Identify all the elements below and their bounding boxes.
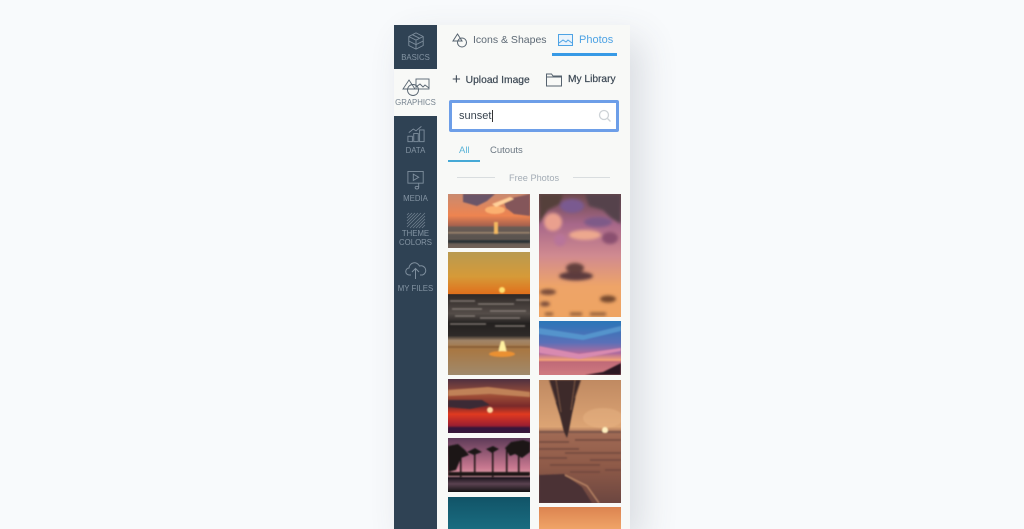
button: upload image: + Upload Image xyxy=(452,71,530,88)
icon: media player xyxy=(408,171,424,190)
subtab underline xyxy=(448,160,480,162)
photo grid xyxy=(448,194,621,529)
icon: photos xyxy=(558,34,573,46)
photo: colorful clouds xyxy=(539,194,621,317)
label: theme colors: COLORS xyxy=(399,238,432,247)
label: media: MEDIA xyxy=(403,194,428,203)
label: graphics: GRAPHICS xyxy=(395,98,436,107)
panel: active graphics tab xyxy=(394,69,437,116)
tab: icons and shapes: Icons & Shapes xyxy=(473,34,547,46)
tab: photos: Photos xyxy=(579,34,613,46)
icon: library folder xyxy=(546,74,562,86)
icon: upload cloud xyxy=(405,262,426,279)
icon: theme colors hatch xyxy=(406,212,426,228)
icon: search magnifier xyxy=(598,110,611,122)
photo: sunset over sea with clouds xyxy=(448,194,530,248)
photo: orange sky xyxy=(539,507,621,529)
panel: editor sidebar xyxy=(394,25,630,529)
photo: red sunset xyxy=(448,379,530,433)
subtab: all: All xyxy=(459,145,470,156)
tab underline xyxy=(552,53,617,56)
label: my files: MY FILES xyxy=(398,284,433,293)
label: theme colors xyxy=(399,229,432,247)
icon: graphics shapes xyxy=(402,78,430,96)
photo: palm frond over sunset sea xyxy=(539,380,623,503)
search box xyxy=(449,100,619,132)
photo: blue and pink dusk xyxy=(538,321,621,375)
photo: teal water xyxy=(448,497,530,529)
icon: basics cube xyxy=(408,32,424,50)
icon: icons and shapes xyxy=(452,33,467,48)
photo: palm trees silhouette xyxy=(448,438,530,492)
section heading: free photos: Free Photos xyxy=(509,173,559,183)
panel: dark navigation rail xyxy=(394,25,437,529)
button: my library: My Library xyxy=(568,74,616,85)
label: data: DATA xyxy=(406,146,425,155)
label: basics: BASICS xyxy=(401,53,430,62)
icon: data chart xyxy=(408,126,424,142)
photo: sun on horizon and beach fire xyxy=(448,252,530,375)
label: theme colors: THEME xyxy=(402,229,429,238)
subtab: cutouts: Cutouts xyxy=(490,145,523,156)
search text: sunset xyxy=(459,110,491,122)
